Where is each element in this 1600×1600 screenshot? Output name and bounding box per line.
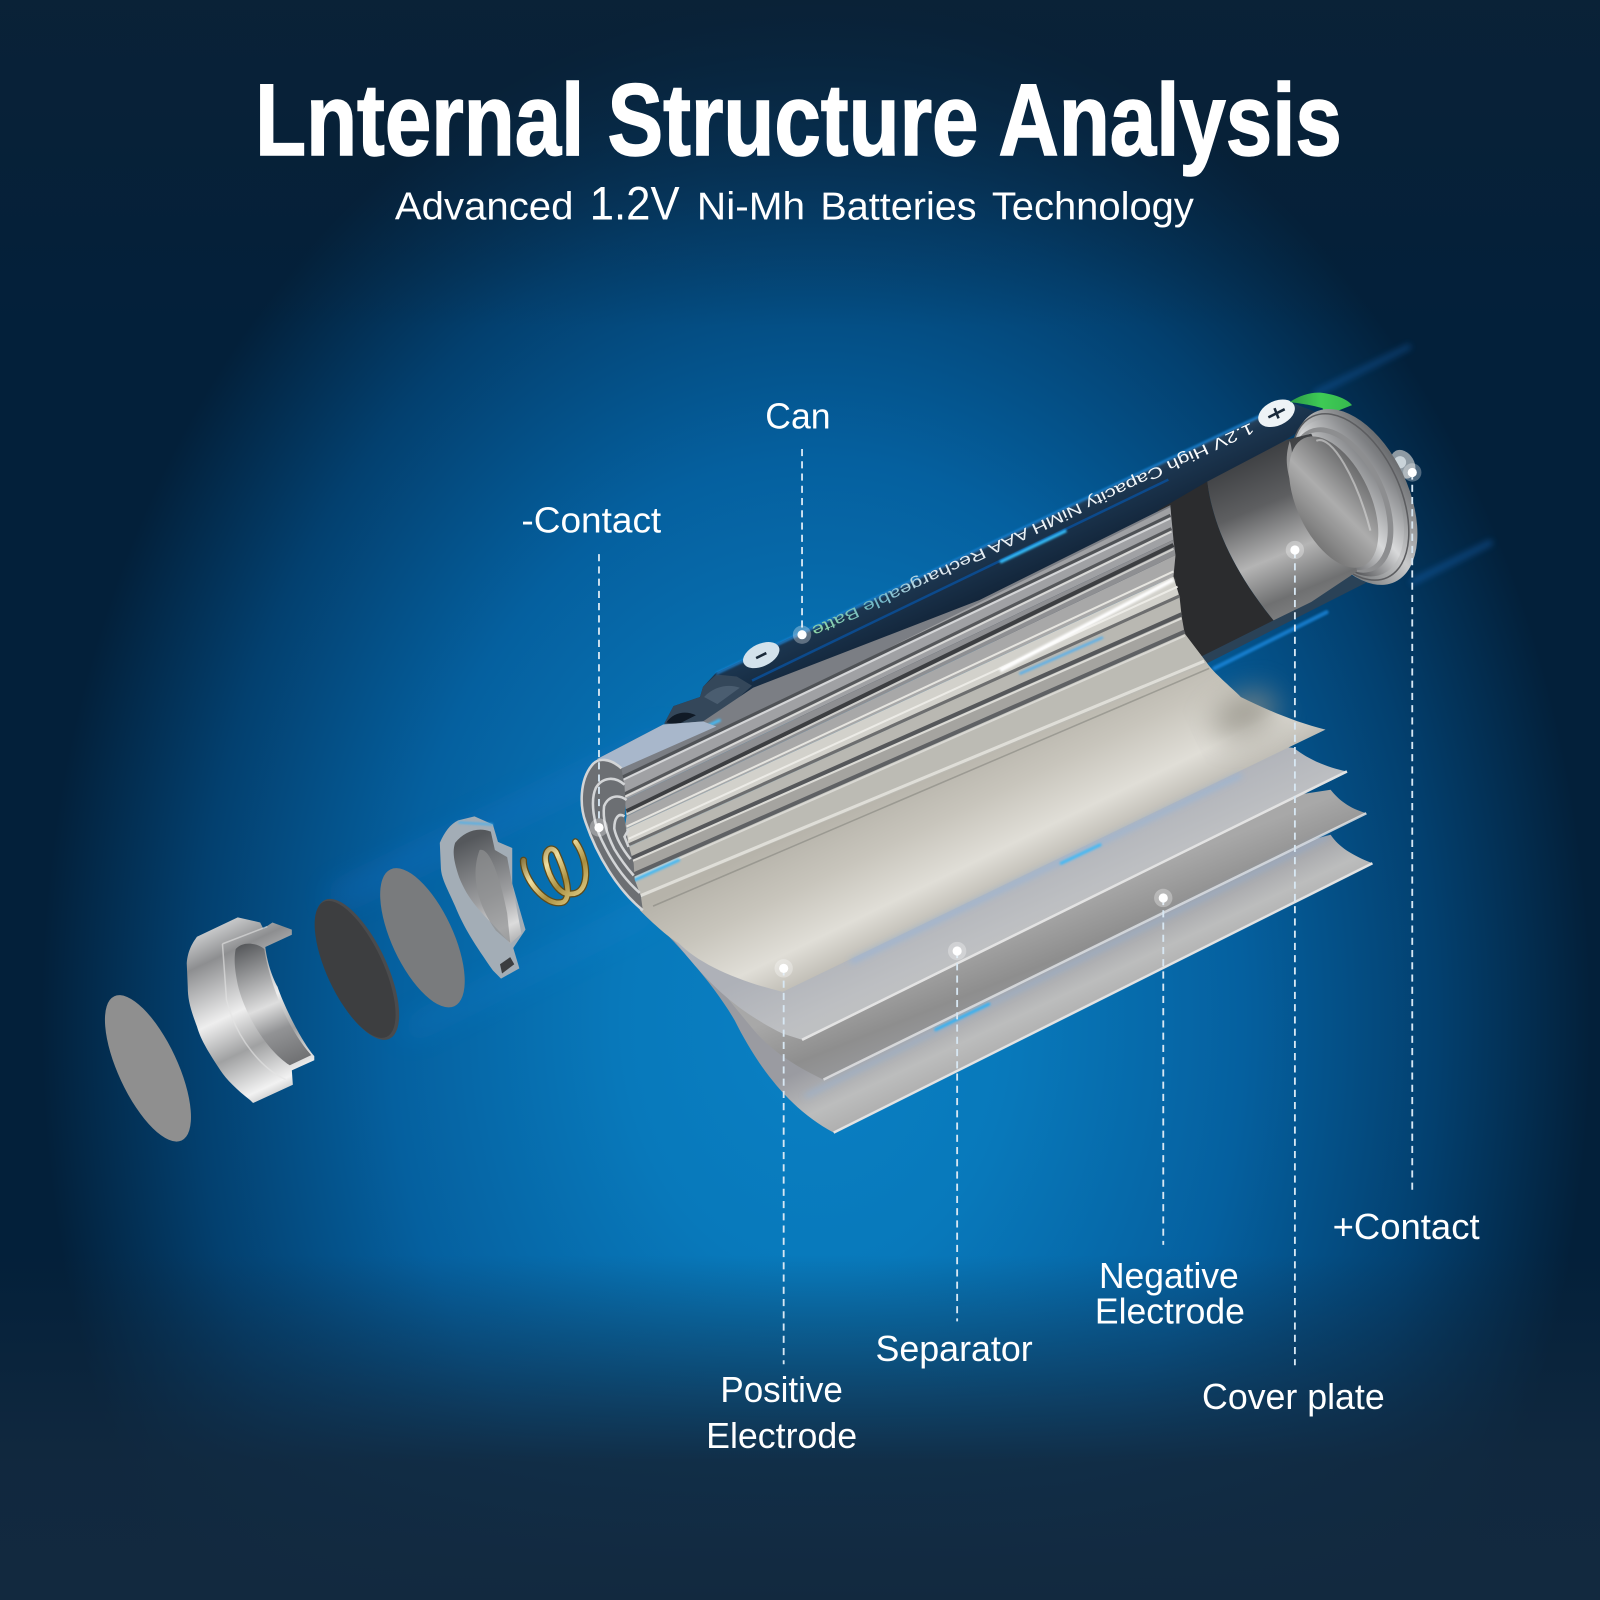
label: Negative Electrode: Electrode bbox=[1095, 1291, 1245, 1331]
marker dots bbox=[590, 463, 1421, 978]
title: Lnternal Structure Analysis bbox=[255, 63, 1342, 177]
fin edge lines bbox=[621, 515, 1209, 906]
top terminal contact bbox=[1386, 445, 1420, 483]
label: Positive Electrode bbox=[706, 1370, 857, 1456]
label: Positive Electrode: Positive bbox=[720, 1370, 843, 1410]
sheet edges bbox=[802, 771, 1372, 1133]
bright highlight bbox=[1000, 580, 1173, 670]
cap rings bbox=[1267, 389, 1443, 604]
icon: minus terminal mark bbox=[739, 637, 784, 673]
disc: gray separator bbox=[363, 856, 482, 1019]
spring bbox=[523, 842, 586, 903]
icon: plus terminal mark bbox=[1254, 394, 1299, 433]
sheet shadow patch bbox=[1205, 681, 1285, 747]
battery cell bbox=[581, 389, 1443, 1133]
cap: negative contact cup bbox=[440, 816, 526, 979]
subtitle: Technology bbox=[992, 185, 1195, 228]
disc: end plate bbox=[88, 984, 208, 1153]
cover plate: inner cup bbox=[1271, 423, 1397, 581]
can: lower navy strip bbox=[1195, 574, 1366, 663]
label: Separator: Separator bbox=[876, 1329, 1033, 1369]
subtitle: Advanced bbox=[395, 185, 573, 228]
rolled end spiral bbox=[581, 759, 643, 910]
subtitle: Ni-Mh bbox=[697, 185, 805, 228]
electrode sheet 1 bbox=[640, 634, 1326, 992]
subtitle: Batteries bbox=[820, 185, 977, 228]
cover plate: top highlight sliver bbox=[1287, 441, 1292, 480]
subtitle bbox=[395, 177, 1195, 229]
label: Positive Electrode: Electrode bbox=[706, 1416, 857, 1456]
cover plate: interior wall bbox=[1207, 434, 1357, 620]
label: Negative Electrode bbox=[1095, 1256, 1245, 1331]
can: printed label text: 1.2V High Capacity NiMH AAA Rechargeable Batte bbox=[809, 419, 1257, 640]
label: Can: Can bbox=[765, 397, 831, 437]
electrode sheet 3 bbox=[663, 790, 1366, 1080]
can: green positive band bbox=[1290, 393, 1352, 415]
subtitle: 1.2V bbox=[590, 177, 680, 229]
tube outer shell highlight bbox=[597, 721, 716, 768]
cover plate: inner edge bbox=[1316, 440, 1370, 531]
label: -Contact: -Contact bbox=[521, 501, 661, 541]
leader lines bbox=[599, 449, 1412, 1365]
sheet blue reflections bbox=[806, 776, 1327, 1096]
electrode sheet 2 bbox=[653, 714, 1347, 1040]
ring: outer contact bbox=[187, 917, 314, 1103]
label: Cover plate: Cover plate bbox=[1202, 1377, 1385, 1417]
light streaks behind battery bbox=[337, 347, 1490, 1031]
exploded parts bbox=[88, 816, 586, 1153]
fin blue reflections bbox=[627, 638, 1102, 884]
callout lines and dots bbox=[590, 449, 1421, 1365]
label: +Contact: +Contact bbox=[1333, 1207, 1480, 1247]
electrode sheet 4 bbox=[645, 835, 1372, 1133]
can: navy outer casing bbox=[664, 402, 1324, 735]
disc: dark separator bbox=[298, 888, 416, 1051]
interior black lining bbox=[1158, 482, 1273, 657]
rolled electrode fins bbox=[597, 505, 1209, 906]
label: Negative Electrode: Negative bbox=[1099, 1256, 1239, 1296]
